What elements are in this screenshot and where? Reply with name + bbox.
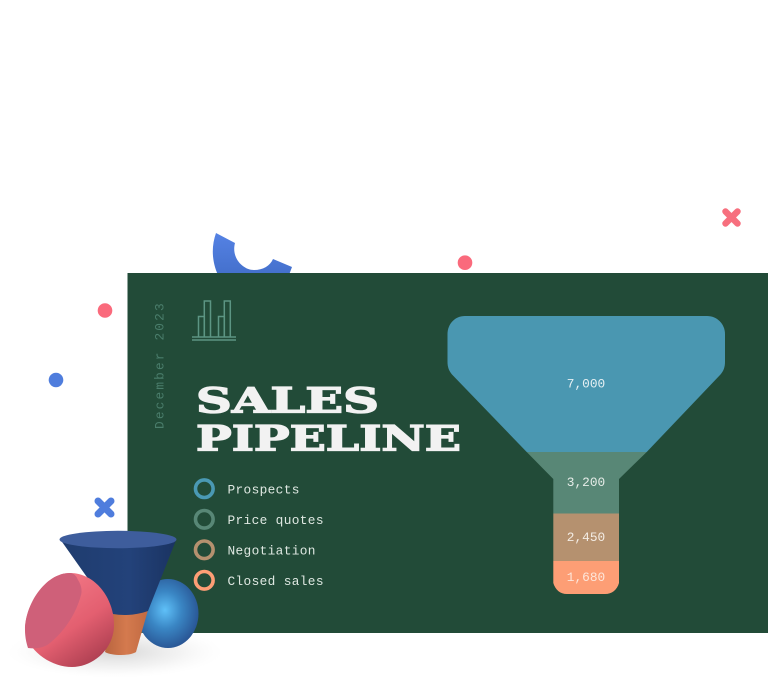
decorative shape: blue cross (98, 501, 111, 514)
ground shadow (7, 626, 223, 678)
legend item: price quotes: Price quotes (228, 513, 324, 528)
orange cone tip (105, 610, 148, 655)
decorative shape: pink cross (726, 212, 738, 224)
funnel segment: closed sales 1,680 (553, 561, 619, 594)
navy cone top (60, 531, 176, 548)
3D shapes illustration (7, 531, 223, 678)
funnel segment: prospects 7,000: 7,000 (567, 376, 605, 392)
navy cone (60, 539, 176, 615)
funnel segment: price quotes 3,200 (527, 452, 647, 514)
funnel segment: closed sales 1,680: 1,680 (567, 570, 605, 585)
title: SALES (196, 380, 379, 422)
legend item: prospects: Prospects (228, 482, 300, 498)
decorative shape: pink dot top (458, 255, 472, 270)
decorative shape: blue dot left (49, 373, 63, 387)
title (196, 380, 461, 460)
funnel chart (448, 316, 725, 594)
funnel segment: prospects 7,000 (448, 316, 725, 452)
legend item: closed sales: Closed sales (228, 574, 324, 589)
funnel segment: price quotes 3,200: 3,200 (567, 475, 605, 490)
panel: dark green background (128, 273, 768, 633)
funnel segment: negotiation 2,450 (553, 514, 619, 561)
decorative shape: pink dot left (98, 303, 112, 318)
vertical date label: December 2023 (152, 301, 168, 429)
decorative shape: blue arc (213, 233, 292, 275)
title: PIPELINE (196, 418, 461, 460)
pink hemisphere (25, 573, 114, 667)
funnel segment: negotiation 2,450: 2,450 (567, 530, 605, 545)
legend item: negotiation: Negotiation (228, 544, 316, 558)
legend (196, 480, 324, 589)
icon: bar chart (192, 301, 236, 340)
blue sphere (138, 579, 198, 648)
